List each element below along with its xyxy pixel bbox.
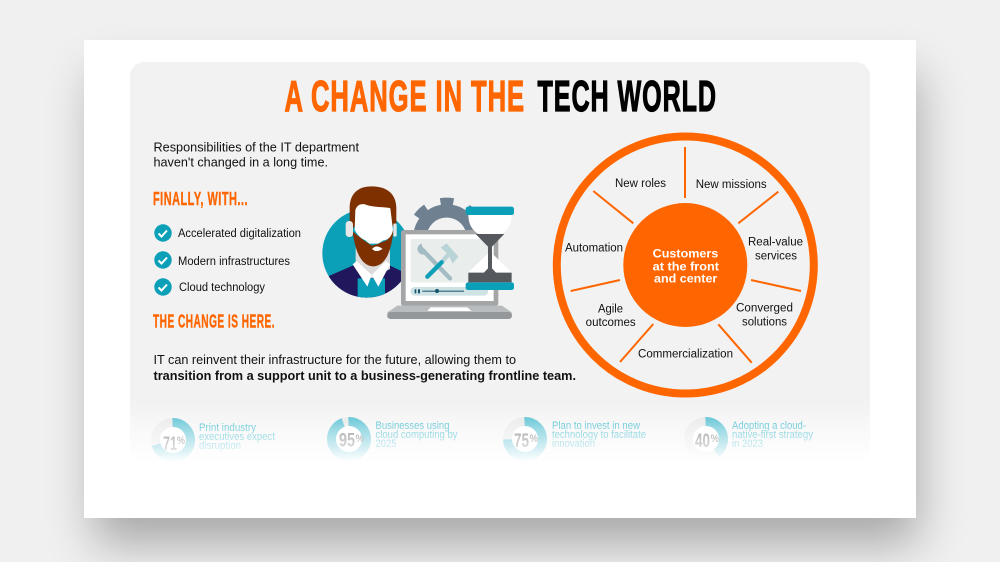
icon: worker portrait	[322, 186, 404, 298]
center text: and center	[654, 272, 718, 286]
wheel diagram	[557, 136, 814, 394]
intro text: Responsibilities of the IT department	[154, 140, 360, 154]
stat: 75%: Plan to invest in new	[552, 420, 640, 432]
center text	[653, 247, 719, 286]
white fade over bottom of panel	[120, 402, 880, 462]
wheel labels: New roles	[615, 178, 666, 190]
title: A CHANGE IN THE	[284, 72, 525, 121]
closing text	[154, 353, 576, 383]
infographic canvas	[130, 62, 870, 459]
wheel labels: Real-value	[748, 237, 803, 249]
wheel labels: solutions	[742, 316, 787, 328]
wheel labels: Automation	[565, 243, 623, 255]
icon: gear	[411, 202, 482, 273]
stat: 75%	[508, 420, 646, 456]
stat: 75%: innovation	[552, 438, 595, 450]
heading: finally, with: FINALLY, WITH...	[153, 189, 248, 209]
icon: hammer	[442, 253, 449, 262]
stat: 95%: cloud computing by	[376, 429, 458, 441]
center circle	[623, 203, 747, 327]
item: accelerated digitalization: Accelerated digitalization	[178, 228, 301, 240]
wheel labels	[565, 178, 803, 361]
checklist	[154, 224, 301, 296]
stat: 40%: 40	[695, 431, 710, 452]
wheel labels: Converged	[736, 303, 793, 315]
intro text: haven't changed in a long time.	[154, 156, 328, 170]
stat: 75%: technology to facilitate	[552, 429, 646, 441]
stat: 40%: %	[710, 433, 719, 445]
stat: 71%: 71	[163, 434, 177, 455]
stat: 95%: %	[356, 433, 364, 445]
icon: hourglass	[466, 207, 514, 290]
stat: 95%	[332, 420, 458, 456]
wheel labels: Agile	[598, 304, 623, 316]
spokes	[571, 147, 801, 363]
heading: the change is here: THE CHANGE IS HERE.	[153, 312, 275, 332]
wheel labels: New missions	[696, 179, 767, 191]
stat: 40%	[688, 420, 813, 456]
closing text: IT can reinvent their infrastructure for the future, allowing them to	[154, 353, 516, 367]
wheel labels: services	[755, 250, 797, 262]
stat: 75%: %	[530, 433, 538, 445]
icon: wrench	[422, 249, 450, 278]
stat: 75%: 75	[514, 431, 529, 452]
intro text	[154, 140, 360, 170]
stat: 95%: 2025	[376, 438, 396, 450]
stat: 71%: disruption	[199, 440, 241, 452]
title: TECH WORLD	[538, 72, 717, 121]
stat: 40%: Adopting a cloud-	[732, 420, 806, 432]
panel: grey background	[130, 62, 870, 472]
outer ring	[557, 136, 814, 394]
item: modern infrastructures: Modern infrastructures	[178, 256, 290, 268]
stat: 95%: Businesses using	[376, 420, 450, 432]
center text: Customers	[653, 247, 719, 261]
stat: 71%: Print industry	[199, 422, 256, 434]
icon: laptop	[387, 230, 512, 319]
stat: 71%: executives expect	[199, 431, 275, 443]
item: modern infrastructures	[154, 251, 290, 269]
stat: 95%: 95	[339, 430, 355, 452]
center text: at the front	[653, 260, 719, 274]
item: cloud technology: Cloud technology	[179, 282, 265, 294]
wheel labels: Commercialization	[638, 349, 733, 361]
white slide card	[84, 40, 916, 518]
stat: 40%: in 2023	[732, 438, 763, 450]
stat: 71%: %	[177, 435, 185, 447]
stat: 71%	[156, 422, 275, 458]
illustration: IT worker, laptop, gear and hourglass	[322, 186, 514, 319]
wheel labels: outcomes	[586, 317, 636, 329]
closing text: transition from a support unit to a business-generating frontline team.	[154, 369, 576, 383]
item: cloud technology	[154, 278, 265, 296]
stat: 40%: native-first strategy	[732, 429, 813, 441]
item: accelerated digitalization	[154, 224, 301, 242]
